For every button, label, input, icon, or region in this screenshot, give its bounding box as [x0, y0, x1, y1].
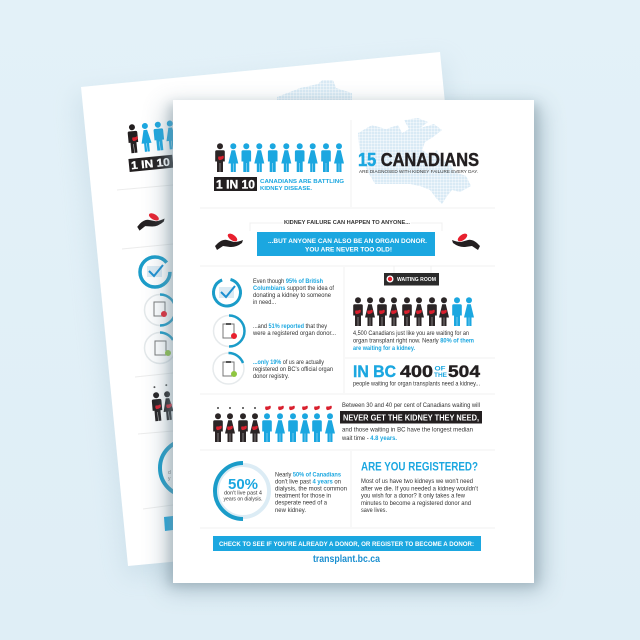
stat: 400 of 504: OF [434, 366, 446, 372]
text: 19 percent: donor registry. [253, 374, 289, 380]
icon row: waiting people [353, 297, 474, 326]
text: 19 percent: ...only 19% of us are actually [253, 360, 324, 366]
stat: 400 of 504: IN BC [353, 362, 396, 381]
back sheet 1 in 10 label: 1 IN 10 [131, 157, 171, 172]
stat: 400 of 504: 504 [448, 362, 481, 381]
text: 51 percent: were a registered organ donor... [252, 331, 336, 337]
text: longest wait [341, 428, 473, 442]
panel: back sheet [81, 52, 487, 566]
text: 95 percent: Even though 95% of British [253, 279, 323, 285]
text: 4,500 canadians [353, 331, 474, 352]
text: dialysis: don't live past 4 years on [275, 479, 341, 485]
shadow of front sheet [166, 106, 542, 590]
caption: diagnosed: ARE DIAGNOSED WITH KIDNEY FAILURE EVERY DAY. [359, 169, 478, 175]
chart: 50 percent ring: don't live past 4 [224, 490, 262, 496]
text: registered body: save lives. [361, 508, 387, 514]
map of canada [358, 118, 471, 204]
blue callout: YOU ARE NEVER TOO OLD! [305, 246, 392, 254]
text: registered body: Most of us have two kidneys we won't need [361, 479, 473, 485]
back sheet hand icon [136, 211, 165, 231]
call to action bar [213, 536, 481, 551]
text: 51 percent [252, 324, 336, 337]
panel: front sheet [173, 100, 534, 583]
section rules [200, 120, 495, 528]
icon: ring 95 percent [210, 276, 244, 309]
panel: 1 in 10 [214, 143, 344, 192]
text: registered body [361, 479, 478, 514]
text: dialysis: new kidney. [275, 508, 306, 514]
text: 4,500 canadians: organ transplant right now. Nearly 80% of them [353, 338, 474, 344]
panel: are you registered [361, 462, 478, 514]
text: registered body: you wish for a donor? It only takes a few [361, 494, 466, 500]
chart: 50 percent ring: 50% [228, 476, 258, 493]
link: transplant.bc.ca: transplant.bc.ca [313, 554, 380, 565]
icon: right hand with kidney [452, 232, 480, 250]
text: longest wait: wait time - 4.8 years. [341, 436, 397, 442]
heading: 15 canadians: 15 CANADIANS [358, 150, 479, 170]
back sheet big ring: y [168, 476, 171, 482]
stat: 400 of 504: people waiting for organ transplants need a kidney... [353, 382, 480, 388]
caption: canadians battling [260, 179, 344, 192]
text: dialysis: treatment for those in [275, 494, 331, 500]
back sheet ring 1 [140, 257, 170, 287]
text: 19 percent [253, 360, 333, 380]
stat: 400 of 504: THE [434, 373, 447, 379]
text: dialysis [275, 472, 347, 514]
blue callout: ...BUT ANYONE CAN ALSO BE AN ORGAN DONOR. [268, 238, 427, 245]
text: registered body: minutes to become a registered donor and [361, 501, 471, 507]
back sheet waiting figures [150, 384, 174, 421]
back sheet blue bar [164, 516, 173, 531]
text: 4,500 canadians: 4,500 Canadians just like you are waiting for an [353, 331, 469, 337]
text: 95 percent [253, 279, 334, 306]
text: 4,500 canadians: are waiting for a kidney. [353, 346, 415, 352]
text: 95 percent: Columbians support the idea of [253, 286, 334, 292]
text: dialysis: dialysis, the most common [275, 486, 347, 492]
waiting room sign: WAITING ROOM [397, 277, 436, 283]
text: 95 percent: donating a kidney to someone [253, 293, 332, 299]
intro line: KIDNEY FAILURE CAN HAPPEN TO ANYONE... [284, 220, 410, 226]
icon: ring 51 percent [214, 316, 244, 346]
panel: 15 canadians [358, 118, 479, 204]
shadow under back sheet [75, 60, 492, 578]
back sheet rules [117, 185, 173, 509]
caption: canadians battling: KIDNEY DISEASE. [260, 186, 313, 192]
back sheet big ring [160, 440, 188, 496]
call to action bar: CHECK TO SEE IF YOU'RE ALREADY A DONOR, OR REGISTER TO BECOME A DONOR: [219, 542, 474, 548]
panel: waiting room [353, 273, 481, 388]
callout: never get the kidney: NEVER GET THE KIDNEY THEY NEED, [343, 414, 479, 422]
text: longest wait: and those waiting in BC have the longest median [342, 428, 473, 434]
heading: are you registered: ARE YOU REGISTERED? [361, 462, 478, 474]
panel: donor statistics [210, 276, 336, 384]
icon: left hand with kidney [215, 232, 243, 250]
text: 95 percent: in need... [253, 300, 276, 306]
caption: canadians battling: CANADIANS ARE BATTLING [260, 179, 344, 185]
chart: 50 percent ring: years on dialysis. [224, 496, 262, 502]
text: 19 percent: registered on BC's official organ [253, 367, 333, 373]
back sheet ring 2 [144, 294, 176, 326]
text: dialysis: desperate need of a [275, 501, 328, 507]
back sheet map [277, 80, 352, 100]
blue callout [257, 232, 435, 256]
chart: 50 percent ring [215, 463, 269, 519]
text: 51 percent: ...and 51% reported that they [253, 324, 327, 330]
text: between 30 and 40: Between 30 and 40 per cent of Canadians waiting will [342, 403, 480, 409]
back sheet figures [127, 120, 177, 153]
callout: never get the kidney [340, 411, 482, 424]
back sheet ring 3 [144, 332, 176, 364]
icon row: people with kidneys [213, 406, 335, 442]
icon: ring 19 percent [213, 353, 244, 384]
panel: dialysis [215, 463, 347, 519]
stat: 400 of 504 [353, 362, 481, 388]
icon row: ten people [215, 143, 344, 172]
text: dialysis: Nearly 50% of Canadians [275, 472, 342, 478]
label: 1 in 10: 1 IN 10 [216, 178, 255, 192]
back sheet big ring: d [168, 470, 171, 476]
panel: never get the kidney [213, 403, 482, 442]
stat: 400 of 504: 400 [400, 362, 433, 381]
text: registered body: after we die. If you needed a kidney wouldn't [361, 486, 478, 492]
panel: anyone can donate [215, 220, 480, 256]
